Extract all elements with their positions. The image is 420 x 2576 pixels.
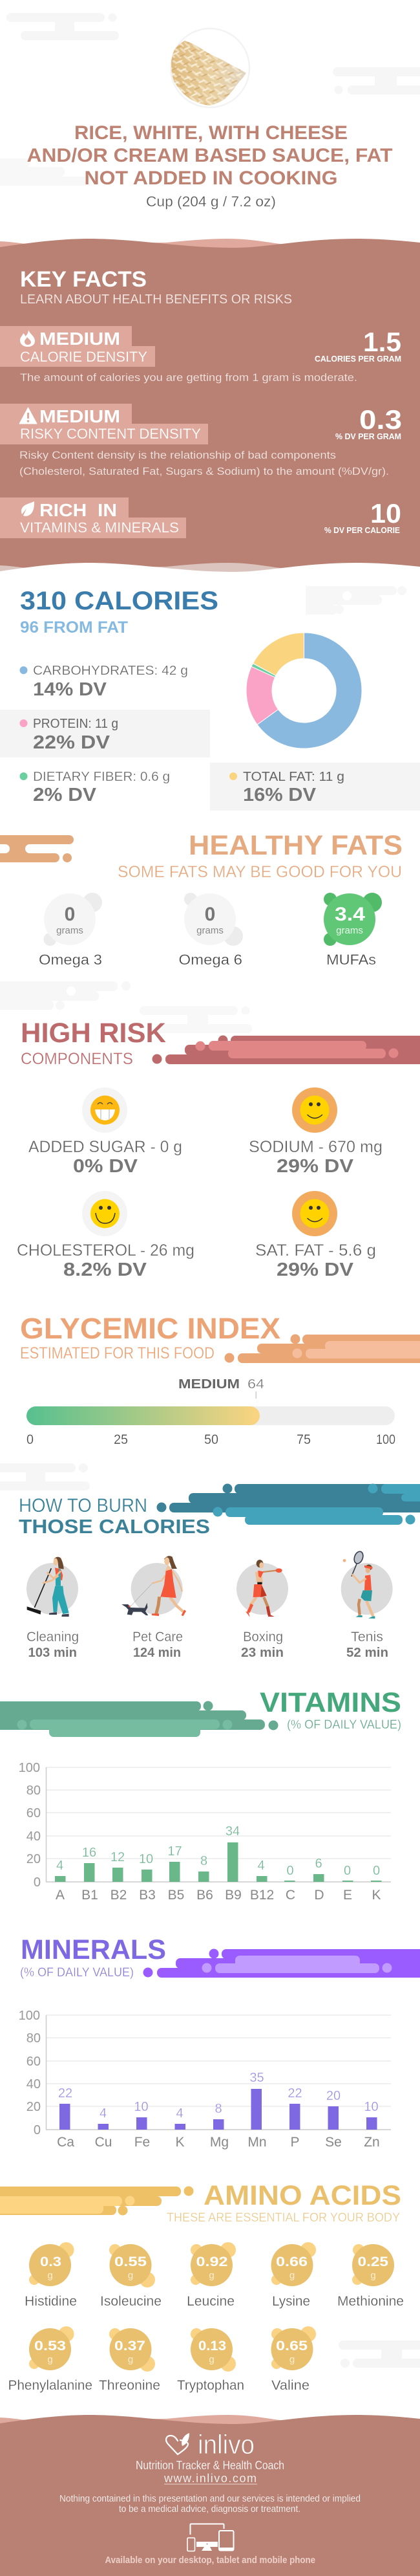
background cloud (306, 586, 406, 615)
amino: methionine: g (370, 2270, 376, 2281)
activity: cleaning: Cleaning (26, 1630, 79, 1644)
amino: leucine: Leucine (187, 2294, 235, 2309)
legend: dietary fiber: 2% DV (33, 785, 97, 805)
bar chart: minerals (19, 2009, 391, 2150)
amino: methionine: 0.25 (358, 2254, 388, 2269)
amino: lysine: Lysine (272, 2294, 310, 2309)
item: mufas: grams (336, 925, 363, 936)
amino: leucine: g (209, 2270, 215, 2281)
item: omega 6: 0 (205, 904, 215, 925)
bar chart: minerals: 40 (26, 2077, 41, 2091)
heading: key facts: KEY FACTS (20, 267, 147, 292)
donut chart (246, 633, 362, 748)
activity: tennis: 52 min (346, 1646, 388, 1660)
item: omega 6: grams (196, 925, 224, 936)
bar chart: vitamins: B12 (250, 1888, 274, 1903)
heading: glycemic index: GLYCEMIC INDEX (20, 1312, 280, 1345)
amino: valine: g (289, 2354, 295, 2365)
amino: valine: 0.65 (276, 2339, 308, 2353)
bar chart: vitamins: B3 (139, 1888, 156, 1903)
logo: inlivo wordmark: inlivo (198, 2429, 255, 2460)
website link: www.inlivo.com (163, 2472, 257, 2485)
amino: histidine: 0.3 (40, 2254, 61, 2269)
fact: risky content density (0, 404, 402, 477)
background cloud: amino acids (339, 2341, 420, 2368)
item: sodium: 29% DV (277, 1156, 354, 1177)
item: saturated fat: SAT. FAT - 5.6 g (255, 1241, 376, 1260)
illustration: person cleaning (26, 1557, 78, 1617)
amino: phenylalanine: Phenylalanine (8, 2378, 92, 2393)
panel: healthy fats (0, 830, 403, 968)
item: mufas: MUFAs (326, 952, 376, 968)
amino: histidine (25, 2242, 77, 2309)
fact: rich in vitamins and minerals (0, 497, 401, 538)
activity: pet care (121, 1556, 186, 1660)
bar chart: minerals: 100 (19, 2009, 40, 2023)
bar chart: minerals: 22 (288, 2086, 302, 2101)
gauge scale: 0 (26, 1432, 34, 1447)
bar chart: vitamins: K (372, 1888, 381, 1903)
panel: high risk components (17, 1018, 420, 1280)
bar chart: vitamins: 4 (257, 1859, 265, 1873)
bar chart: minerals: 20 (326, 2089, 341, 2103)
amino: isoleucine (100, 2244, 162, 2309)
bar chart: minerals: Se (325, 2135, 342, 2150)
bar chart: minerals: 20 (26, 2100, 41, 2114)
heading: vitamins: VITAMINS (260, 1687, 401, 1718)
amino: lysine (271, 2242, 316, 2309)
panel: how to burn those calories (19, 1484, 420, 1660)
bar chart: vitamins: D (314, 1888, 324, 1903)
bar chart: vitamins: 4 (56, 1859, 63, 1873)
subheading: SOME FATS MAY BE GOOD FOR YOU (118, 863, 402, 881)
activity: tennis: Tenis (351, 1630, 383, 1644)
amino: phenylalanine: 0.53 (34, 2339, 66, 2353)
amino: threonine: Threonine (99, 2378, 160, 2393)
heading: 310 calories: 310 CALORIES (20, 587, 218, 615)
amino: leucine (187, 2242, 236, 2309)
gauge scale: 100 (376, 1432, 395, 1447)
band: protein (0, 710, 210, 758)
icon: devices (187, 2524, 234, 2551)
gauge scale: 50 (204, 1432, 218, 1447)
item: omega 6: Omega 6 (178, 952, 242, 968)
item: cholesterol: CHOLESTEROL - 26 mg (17, 1241, 194, 1260)
bar chart: vitamins: B2 (110, 1888, 127, 1903)
item: omega 3: 0 (65, 904, 75, 925)
activity: cleaning (26, 1557, 79, 1660)
bar chart: vitamins: 0 (373, 1864, 380, 1878)
fact: calorie density: 1.5 (363, 327, 401, 357)
decorative cloud (143, 1948, 420, 1978)
subheading: THESE ARE ESSENTIAL FOR YOUR BODY (167, 2210, 400, 2225)
heading: healthy fats: HEALTHY FATS (189, 830, 403, 861)
heading: minerals: MINERALS (21, 1934, 166, 1965)
legend: total fat: TOTAL FAT: 11 g (243, 770, 344, 784)
activity: boxing (236, 1560, 288, 1660)
amino: isoleucine: Isoleucine (100, 2294, 162, 2309)
title (27, 122, 393, 189)
illustration: woman walking dog (121, 1556, 186, 1616)
bar chart: vitamins: 20 (26, 1852, 41, 1866)
subheading: components: COMPONENTS (21, 1050, 133, 1068)
item: omega 3 (39, 893, 102, 968)
item: added sugar: ADDED SUGAR - 0 g (28, 1138, 182, 1156)
bar chart: vitamins: 12 (110, 1850, 125, 1864)
panel: glycemic index (20, 1312, 420, 1447)
bar chart: vitamins: 40 (26, 1829, 41, 1844)
fact: calorie density: CALORIE DENSITY (20, 349, 147, 365)
legend: dietary fiber: DIETARY FIBER: 0.6 g (33, 770, 170, 784)
activity: pet care: Pet Care (132, 1630, 183, 1644)
wave: footer light (0, 2415, 420, 2432)
decorative cloud (156, 1484, 420, 1525)
icon: smiling face on grey (82, 1191, 127, 1236)
bar chart: vitamins: A (56, 1888, 65, 1903)
icon: flame (20, 330, 35, 347)
bar chart: vitamins: 0 (344, 1864, 351, 1878)
bar chart: vitamins: B6 (196, 1888, 213, 1903)
subheading: LEARN ABOUT HEALTH BENEFITS OR RISKS (20, 292, 292, 307)
amino: threonine (99, 2328, 160, 2393)
amino: phenylalanine (8, 2326, 92, 2393)
title: NOT ADDED IN COOKING (84, 168, 337, 189)
gauge value: 64 (247, 1377, 264, 1392)
fact: risky content density: % DV PER GRAM (335, 431, 401, 441)
bar chart: vitamins: 60 (26, 1806, 41, 1820)
illustration: tennis player (341, 1550, 393, 1619)
panel: footer (0, 2415, 420, 2576)
bar chart: vitamins: 80 (26, 1784, 41, 1798)
decorative cloud (225, 1334, 420, 1363)
amino: isoleucine: 0.55 (114, 2254, 147, 2269)
amino: isoleucine: g (128, 2270, 133, 2281)
item: saturated fat (255, 1191, 376, 1280)
bar chart: minerals: 4 (100, 2106, 107, 2121)
fact: calorie density: CALORIES PER GRAM (315, 354, 401, 364)
activity: boxing: Boxing (243, 1630, 283, 1644)
legend: protein (19, 717, 118, 753)
illustration: boxer (236, 1560, 288, 1617)
amino: methionine: Methionine (337, 2294, 404, 2309)
bar chart: minerals: 22 (58, 2086, 72, 2101)
bar chart: minerals: 60 (26, 2055, 41, 2069)
fact: rich in vitamins and minerals: % DV PER CALORIE (324, 525, 400, 535)
icon: warning triangle (19, 408, 37, 424)
background cloud: top right (333, 67, 420, 94)
fact: rich in vitamins and minerals: VITAMINS & MINERALS (20, 519, 179, 536)
amino: valine (271, 2326, 316, 2393)
background cloud: above high risk right (140, 1006, 252, 1033)
tagline: Nutrition Tracker & Health Coach (136, 2459, 284, 2472)
bar chart: vitamins: C (286, 1888, 295, 1903)
icon: leaf (21, 501, 34, 516)
legend: total fat (229, 770, 344, 805)
item: sodium (249, 1087, 383, 1177)
heading: those calories: THOSE CALORIES (19, 1515, 210, 1538)
amino: leucine: 0.92 (196, 2254, 227, 2269)
amino: valine: Valine (271, 2378, 310, 2393)
decorative cloud (0, 1701, 278, 1737)
amino: lysine: 0.66 (276, 2254, 308, 2269)
legend: carbohydrates: 14% DV (33, 679, 107, 700)
legend: dietary fiber (19, 770, 170, 805)
item: saturated fat: 29% DV (277, 1260, 354, 1280)
fact: risky content density: RISKY CONTENT DENSITY (20, 426, 201, 442)
bar chart: vitamins: B9 (225, 1888, 242, 1903)
bar chart: minerals: P (290, 2135, 300, 2150)
bar chart: minerals: Mg (210, 2135, 229, 2150)
panel: amino acids (0, 2180, 404, 2393)
fact: risky content density: Risky Content density is the relationship of bad components (19, 449, 336, 461)
bar chart: vitamins: 6 (315, 1857, 322, 1871)
panel: key facts (0, 239, 420, 576)
item: cholesterol: 8.2% DV (63, 1260, 147, 1280)
gauge scale: 75 (297, 1432, 311, 1447)
amino: phenylalanine: g (47, 2354, 53, 2365)
subheading: (% OF DAILY VALUE) (287, 1718, 401, 1732)
bar chart: vitamins: 100 (19, 1761, 40, 1775)
wave: top (0, 239, 420, 259)
bar chart: minerals: K (175, 2135, 185, 2150)
activity: boxing: 23 min (241, 1646, 284, 1660)
subheading: 96 from fat: 96 FROM FAT (20, 618, 128, 637)
amino: histidine: Histidine (25, 2294, 77, 2309)
amino: histidine: g (47, 2270, 53, 2281)
gauge value (178, 1377, 264, 1399)
activity: cleaning: 103 min (28, 1646, 77, 1660)
amino: threonine: 0.37 (114, 2339, 145, 2353)
bar chart: vitamins: 34 (226, 1824, 240, 1839)
band: total fat (210, 763, 420, 811)
bar chart: minerals: 0 (34, 2123, 41, 2137)
fact: rich in vitamins and minerals: RICH IN (39, 500, 117, 520)
heading: how to burn: HOW TO BURN (19, 1495, 147, 1516)
bar chart: minerals: Ca (57, 2135, 74, 2150)
disclaimer: Nothing contained in this presentation and our services is intended or implied (59, 2494, 361, 2504)
bar chart: minerals: 8 (215, 2102, 222, 2116)
bar chart: minerals: Fe (134, 2135, 150, 2150)
bar chart: minerals: Cu (95, 2135, 112, 2150)
panel: calories (0, 586, 420, 811)
bar chart: vitamins: E (343, 1888, 352, 1903)
item: omega 3: grams (56, 925, 83, 936)
bar chart: vitamins: B1 (81, 1888, 98, 1903)
bar chart: minerals: Mn (247, 2135, 267, 2150)
disclaimer: to be a medical advice, diagnosis or treatment. (119, 2504, 300, 2515)
subheading: (% OF DAILY VALUE) (20, 1966, 134, 1980)
bar chart: minerals: 4 (176, 2106, 184, 2121)
bar chart: vitamins: 17 (167, 1844, 182, 1859)
gauge scale: 25 (114, 1432, 128, 1447)
wave: bottom (0, 563, 420, 576)
fact: calorie density: MEDIUM (39, 329, 120, 349)
wave and background: footer (0, 2415, 420, 2576)
bar chart: minerals: 35 (249, 2071, 264, 2085)
icon: grinning face (82, 1087, 127, 1133)
gauge scale (26, 1432, 395, 1447)
subheading: ESTIMATED FOR THIS FOOD (20, 1344, 215, 1362)
amino: tryptophan: Tryptophan (177, 2378, 244, 2393)
icon: smiling face on orange (292, 1087, 337, 1133)
amino: tryptophan: 0.13 (198, 2339, 226, 2353)
panel: minerals (19, 1934, 420, 2150)
disclaimer (59, 2494, 361, 2515)
background cloud: burn section (0, 1463, 90, 1490)
food image: rice (168, 28, 249, 107)
item: mufas: 3.4 (335, 904, 365, 925)
amino: tryptophan (177, 2328, 244, 2393)
legend: carbohydrates (19, 664, 188, 700)
background cloud: top left (6, 13, 119, 40)
decorative cloud (0, 2187, 194, 2215)
title: AND/OR CREAM BASED SAUCE, FAT (27, 145, 393, 166)
bar chart: vitamins: 8 (200, 1854, 207, 1868)
heading: high risk: HIGH RISK (21, 1018, 166, 1049)
decorative cloud (0, 835, 74, 862)
icon: smiling face on orange (292, 1191, 337, 1236)
amino: threonine: g (128, 2354, 133, 2365)
decorative cloud (152, 1035, 420, 1064)
bar chart: vitamins: 10 (139, 1852, 153, 1866)
logo: inlivo heart (166, 2433, 189, 2454)
legend: total fat: 16% DV (243, 785, 317, 805)
item: cholesterol (17, 1191, 194, 1280)
activity: pet care: 124 min (133, 1646, 181, 1660)
background cloud: above high risk left (0, 981, 131, 1010)
gauge bar (26, 1406, 395, 1425)
amino: lysine: g (289, 2270, 295, 2281)
item: added sugar: 0% DV (73, 1156, 138, 1177)
bar chart: vitamins: 16 (82, 1846, 96, 1860)
bar chart: vitamins: B5 (168, 1888, 184, 1903)
bar chart: vitamins: 0 (286, 1864, 294, 1878)
legend: protein: PROTEIN: 11 g (33, 717, 118, 731)
panel: vitamins (0, 1687, 401, 1903)
item: added sugar (28, 1087, 182, 1177)
availability note: Available on your desktop, tablet and mobile phone (105, 2555, 315, 2566)
fact: risky content density: MEDIUM (39, 406, 120, 426)
title: RICE, WHITE, WITH CHEESE (74, 122, 348, 144)
fact: rich in vitamins and minerals: 10 (370, 498, 401, 529)
bar chart: vitamins: 0 (34, 1875, 41, 1890)
bar chart: minerals: 10 (134, 2100, 149, 2114)
item: omega 3: Omega 3 (39, 952, 102, 968)
amino: tryptophan: g (209, 2354, 215, 2365)
item: mufas (324, 893, 382, 968)
fact: risky content density: 0.3 (359, 404, 402, 435)
item: sodium: SODIUM - 670 mg (249, 1138, 383, 1156)
bar chart: minerals: 10 (364, 2100, 379, 2114)
bar chart: vitamins (19, 1761, 391, 1903)
fact: risky content density: (Cholesterol, Saturated Fat, Sugars & Sodium) to the amount (%DV/gr). (19, 465, 389, 477)
legend: carbohydrates: CARBOHYDRATES: 42 g (33, 664, 188, 678)
bar chart: minerals: 80 (26, 2031, 41, 2046)
activity: tennis (341, 1550, 393, 1660)
fact: calorie density (0, 326, 401, 384)
item: omega 6 (178, 893, 243, 968)
bar chart: minerals: Zn (364, 2135, 380, 2150)
heading: amino acids: AMINO ACIDS (204, 2180, 401, 2211)
amino: methionine (337, 2244, 404, 2309)
background cloud: title left (0, 158, 90, 186)
fact: calorie density: The amount of calories you are getting from 1 gram is moderate. (20, 371, 357, 384)
serving size: Cup (204 g / 7.2 oz) (146, 193, 276, 210)
legend: protein: 22% DV (33, 732, 110, 753)
gauge value: MEDIUM (178, 1377, 240, 1392)
